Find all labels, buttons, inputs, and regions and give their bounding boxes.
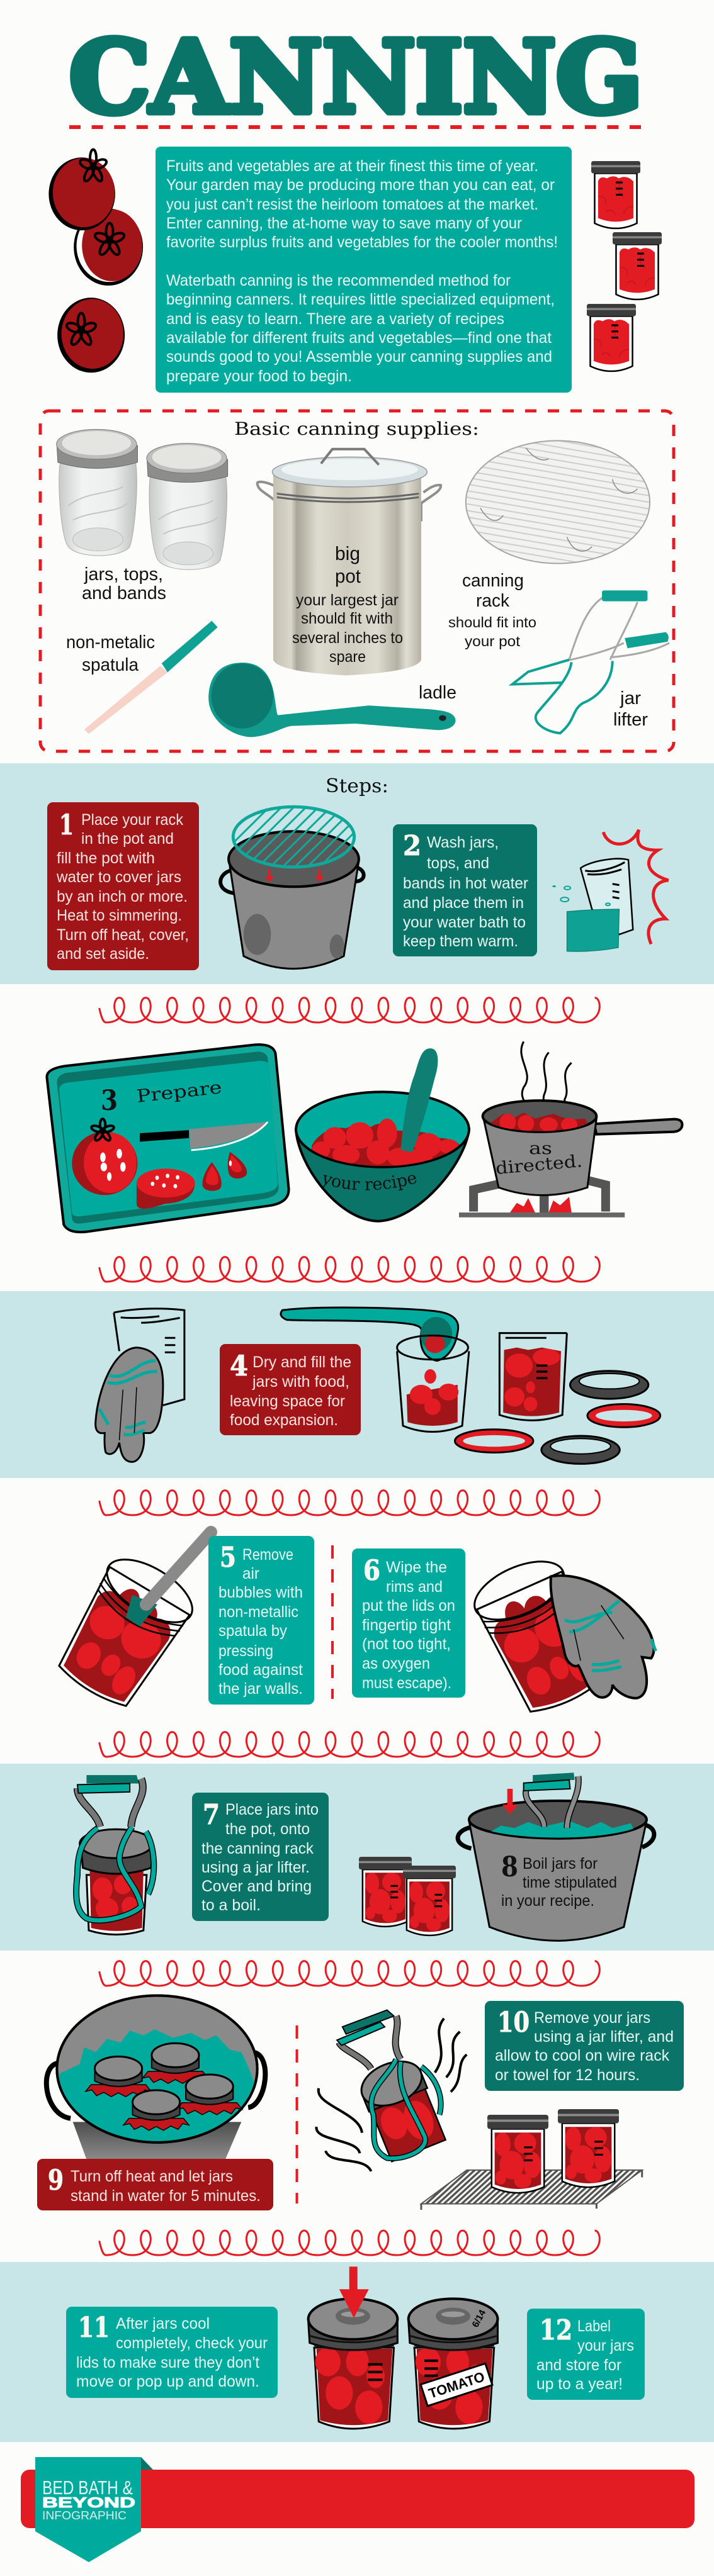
label: canning rack: should fit into <box>448 614 536 630</box>
footer ribbon logo <box>35 2457 153 2562</box>
intro paragraph two: Waterbath canning is the recommended method for <box>166 272 511 289</box>
label: jar lifter: lifter <box>613 710 648 730</box>
step 4 text: food expansion. <box>230 1411 338 1429</box>
step 7 text: using a jar lifter. <box>201 1859 310 1876</box>
footer bar <box>21 2470 694 2528</box>
label: big pot: should fit with <box>301 610 393 627</box>
step 12 text: Label <box>577 2317 611 2335</box>
divider squiggle <box>99 1491 599 1515</box>
intro paragraph two: and is easy to learn. There are a variety of recipes <box>166 310 504 328</box>
step 2 text: bands in hot water <box>403 875 528 892</box>
step 8 text: Boil jars for <box>523 1855 598 1873</box>
label: spatula: spatula <box>82 655 139 675</box>
label: jar lifter: jar <box>620 688 641 708</box>
step 7 text: to a boil. <box>201 1896 261 1914</box>
step 9 text: stand in water for 5 minutes. <box>71 2187 261 2205</box>
step 5 text <box>218 1546 303 1698</box>
step 10 text: Remove your jars <box>534 2009 650 2027</box>
icon: stacked jars <box>587 161 662 371</box>
footer ribbon logo: INFOGRAPHIC <box>42 2509 127 2522</box>
step 6 text: as oxygen <box>362 1655 430 1672</box>
intro paragraph one: favorite surplus fruits and vegetables for the cooler months! <box>166 233 558 251</box>
step 12 text: up to a year! <box>536 2375 623 2393</box>
step 5 text: food against <box>218 1661 303 1679</box>
label: canning rack <box>448 571 536 649</box>
intro paragraph two: sounds good to you! Assemble your canning supplies and <box>166 348 552 366</box>
step 1 text: in the pot and <box>81 830 174 848</box>
step 2 text <box>403 834 528 950</box>
intro paragraph one: Fruits and vegetables are at their finest this time of year. <box>166 157 538 175</box>
panel: step 10 <box>485 2001 684 2091</box>
label: as directed: as <box>529 1139 552 1158</box>
illustration: filled jar and bands <box>455 1333 660 1464</box>
step 8 text: time stipulated <box>523 1874 617 1891</box>
step 12 text: and store for <box>536 2356 621 2374</box>
footer ribbon logo: BEYOND <box>42 2494 135 2511</box>
illustration: pot with rack <box>218 805 366 970</box>
label: jar lifter <box>613 688 648 730</box>
step 6 text: rims and <box>386 1578 443 1596</box>
step 2 text: Wash jars, <box>427 834 499 851</box>
step 5 text: non-metallic <box>218 1603 298 1621</box>
illustration: ladle filling jar <box>281 1308 469 1432</box>
band: steps 11-12 <box>0 2262 714 2442</box>
step 9 text <box>71 2168 261 2205</box>
title dashed rule <box>69 125 642 129</box>
step 11 text: completely, check your <box>116 2334 268 2352</box>
photo: spatula <box>84 621 218 734</box>
title: CANNING <box>69 20 643 136</box>
panel: step 12 <box>527 2309 645 2400</box>
illustration: lifting hot jar <box>316 2010 467 2171</box>
label: jars: and bands <box>82 583 166 603</box>
step 5 text: Remove <box>242 1546 293 1564</box>
step number 1: 1 <box>59 809 74 841</box>
illustration: pot with lifter, step 8 <box>458 1772 654 1940</box>
illustration: tilted jar with glove <box>466 1550 655 1721</box>
label: as directed: directed. <box>495 1151 583 1179</box>
illustration: pot from above with lids <box>47 1996 265 2159</box>
divider squiggle <box>99 1257 599 1282</box>
intro paragraph two <box>166 272 555 385</box>
panel: basic canning supplies <box>40 411 674 751</box>
intro paragraph one: Your garden may be producing more than you can eat, or <box>166 176 555 194</box>
photo: ladle <box>208 663 456 737</box>
photo: big pot <box>258 449 441 675</box>
step 6 text: must escape). <box>362 1674 451 1692</box>
step number 4: 4 <box>230 1350 248 1382</box>
panel: step 6 <box>352 1548 465 1698</box>
divider squiggle <box>99 1961 599 1986</box>
label: big pot: big <box>335 542 360 564</box>
step 12 text: your jars <box>577 2337 634 2355</box>
photo: jar lifter <box>513 590 669 733</box>
step 2 text: your water bath to <box>403 914 526 931</box>
step 5 text: the jar walls. <box>218 1680 303 1698</box>
illustration: jar and gloved hand <box>96 1309 184 1462</box>
label: your recipe <box>321 1175 441 1190</box>
step 11 text: lids to make sure they don’t <box>76 2354 259 2372</box>
step 1 text: fill the pot with <box>57 849 155 867</box>
illustration: jar lifter holding jar <box>76 1775 154 1935</box>
illustration: tilted jar with spatula <box>48 1532 211 1715</box>
step 2 text: and place them in <box>403 894 524 912</box>
step 4 text <box>230 1353 351 1429</box>
step number 5: 5 <box>220 1542 236 1574</box>
jar label: tomato <box>421 2363 492 2406</box>
heading: steps: Steps: <box>326 775 388 797</box>
label: big pot: pot <box>335 565 361 587</box>
photo: jars <box>57 429 228 569</box>
step 11 text: After jars cool <box>116 2315 210 2332</box>
step 7 text: Cover and bring <box>201 1878 312 1895</box>
step 11 text <box>76 2315 268 2390</box>
intro paragraph one <box>166 157 558 251</box>
divider squiggle <box>99 1732 599 1757</box>
panel: step 4 <box>220 1344 361 1435</box>
divider squiggle <box>99 2231 599 2255</box>
divider squiggle <box>99 998 599 1022</box>
illustration: cutting board <box>47 1044 289 1232</box>
step 5 text: bubbles with <box>218 1584 303 1601</box>
label: canning rack: your pot <box>465 633 521 649</box>
panel: step 7 <box>192 1793 329 1921</box>
supplies heading: Basic canning supplies: <box>234 418 479 439</box>
step number 7: 7 <box>203 1799 220 1831</box>
illustration: jar lids and arrow <box>309 2266 497 2429</box>
step number 3: 3 <box>101 1085 118 1117</box>
step number 8: 8 <box>501 1851 518 1883</box>
step 6 text: fingertip tight <box>362 1616 451 1634</box>
illustration: two filled jars <box>359 1857 456 1935</box>
step 5 text: spatula by <box>218 1622 287 1640</box>
step 4 text: leaving space for <box>230 1392 345 1410</box>
step 4 text: jars with food, <box>252 1373 349 1391</box>
step 11 text: move or pop up and down. <box>76 2373 259 2390</box>
label: big pot <box>292 542 403 666</box>
step 6 text: (not too tight, <box>362 1635 451 1653</box>
panel: step 5 <box>208 1536 314 1705</box>
intro paragraph two: beginning canners. It requires little specialized equipment, <box>166 291 555 308</box>
label: big pot: several inches to <box>292 629 403 647</box>
step 5 text: air <box>242 1565 259 1582</box>
label: jars <box>82 564 166 603</box>
lid date: 6/14 <box>470 2308 489 2329</box>
step 5 text: pressing <box>218 1642 273 1660</box>
step 9 text: Turn off heat and let jars <box>71 2168 233 2185</box>
step 1 text: Heat to simmering. <box>57 907 182 924</box>
step 2 text: tops, and <box>427 854 489 872</box>
step 1 text <box>56 811 189 963</box>
step 1 text: and set aside. <box>57 945 149 963</box>
band: steps 1-2 <box>0 763 714 984</box>
step 6 text <box>362 1559 455 1692</box>
step 8 text: in your recipe. <box>501 1892 594 1910</box>
step number 2: 2 <box>403 830 421 862</box>
step 7 text: the pot, onto <box>225 1820 310 1838</box>
label: canning rack: canning <box>462 571 524 591</box>
step 10 text: allow to cool on wire rack <box>495 2047 669 2064</box>
label: as directed <box>495 1139 583 1179</box>
label: jars: jars, tops, <box>84 564 163 585</box>
label: spatula <box>66 632 155 675</box>
step 6 text: Wipe the <box>386 1559 447 1576</box>
step 10 text: or towel for 12 hours. <box>495 2066 640 2084</box>
step 8 text <box>501 1855 617 1910</box>
step 6 text: put the lids on <box>362 1597 455 1615</box>
step number 6: 6 <box>363 1555 380 1587</box>
intro paragraph one: Enter canning, the at-home way to save many of your <box>166 215 522 232</box>
step 10 text <box>495 2009 674 2084</box>
step number 10: 10 <box>497 2007 530 2039</box>
panel: step 2 <box>393 824 537 956</box>
label: big pot: spare <box>329 648 366 666</box>
step 7 text: Place jars into <box>225 1801 319 1818</box>
band: step 4 <box>0 1291 714 1478</box>
step 1 text: Turn off heat, cover, <box>57 926 189 944</box>
panel: step 11 <box>66 2307 278 2398</box>
label: big pot: your largest jar <box>296 591 399 609</box>
step number 12: 12 <box>540 2314 572 2346</box>
step 1 text: water to cover jars <box>56 868 181 886</box>
footer ribbon logo: BED BATH & <box>42 2477 133 2499</box>
photo: canning rack <box>466 440 650 564</box>
panel: step 1 <box>47 802 199 970</box>
step 7 text <box>201 1801 319 1914</box>
intro paragraph one: you just can’t resist the heirloom tomatoes at the market. <box>166 196 538 213</box>
label: prepare: Prepare <box>135 1077 223 1107</box>
icon: lids in water <box>86 2043 242 2131</box>
jar label: tomato: TOMATO <box>427 2368 487 2402</box>
step number 11: 11 <box>78 2312 110 2344</box>
label: spatula: non-metalic <box>66 632 155 652</box>
illustration: mixing bowl: your recipe <box>320 1174 417 1190</box>
step 1 text: by an inch or more. <box>57 888 188 905</box>
panel: step 9 <box>37 2159 273 2210</box>
tomatoes and knife <box>72 1122 268 1209</box>
step 10 text: using a jar lifter, and <box>534 2028 674 2046</box>
intro paragraph two: prepare your food to begin. <box>166 367 352 385</box>
step 2 text: keep them warm. <box>403 932 518 950</box>
step 4 text: Dry and fill the <box>252 1353 351 1371</box>
band: steps 7-8 <box>0 1764 714 1951</box>
intro paragraph two: available for different fruits and vegetables—find one that <box>166 329 552 347</box>
step 12 text <box>536 2317 634 2393</box>
panel: introduction <box>156 147 572 393</box>
illustration: mixing bowl <box>295 1048 471 1223</box>
label: canning rack: rack <box>476 591 509 611</box>
icon: tomatoes <box>48 150 143 372</box>
step 7 text: the canning rack <box>201 1840 314 1857</box>
step number 9: 9 <box>48 2164 64 2197</box>
illustration: jar with sponge and burst <box>552 830 669 951</box>
label: ladle: ladle <box>419 683 456 703</box>
illustration: jars on cooling rack <box>421 2109 642 2210</box>
arrow <box>339 2266 369 2318</box>
step 1 text: Place your rack <box>81 811 183 829</box>
illustration: saucepan on burner <box>459 1041 682 1218</box>
